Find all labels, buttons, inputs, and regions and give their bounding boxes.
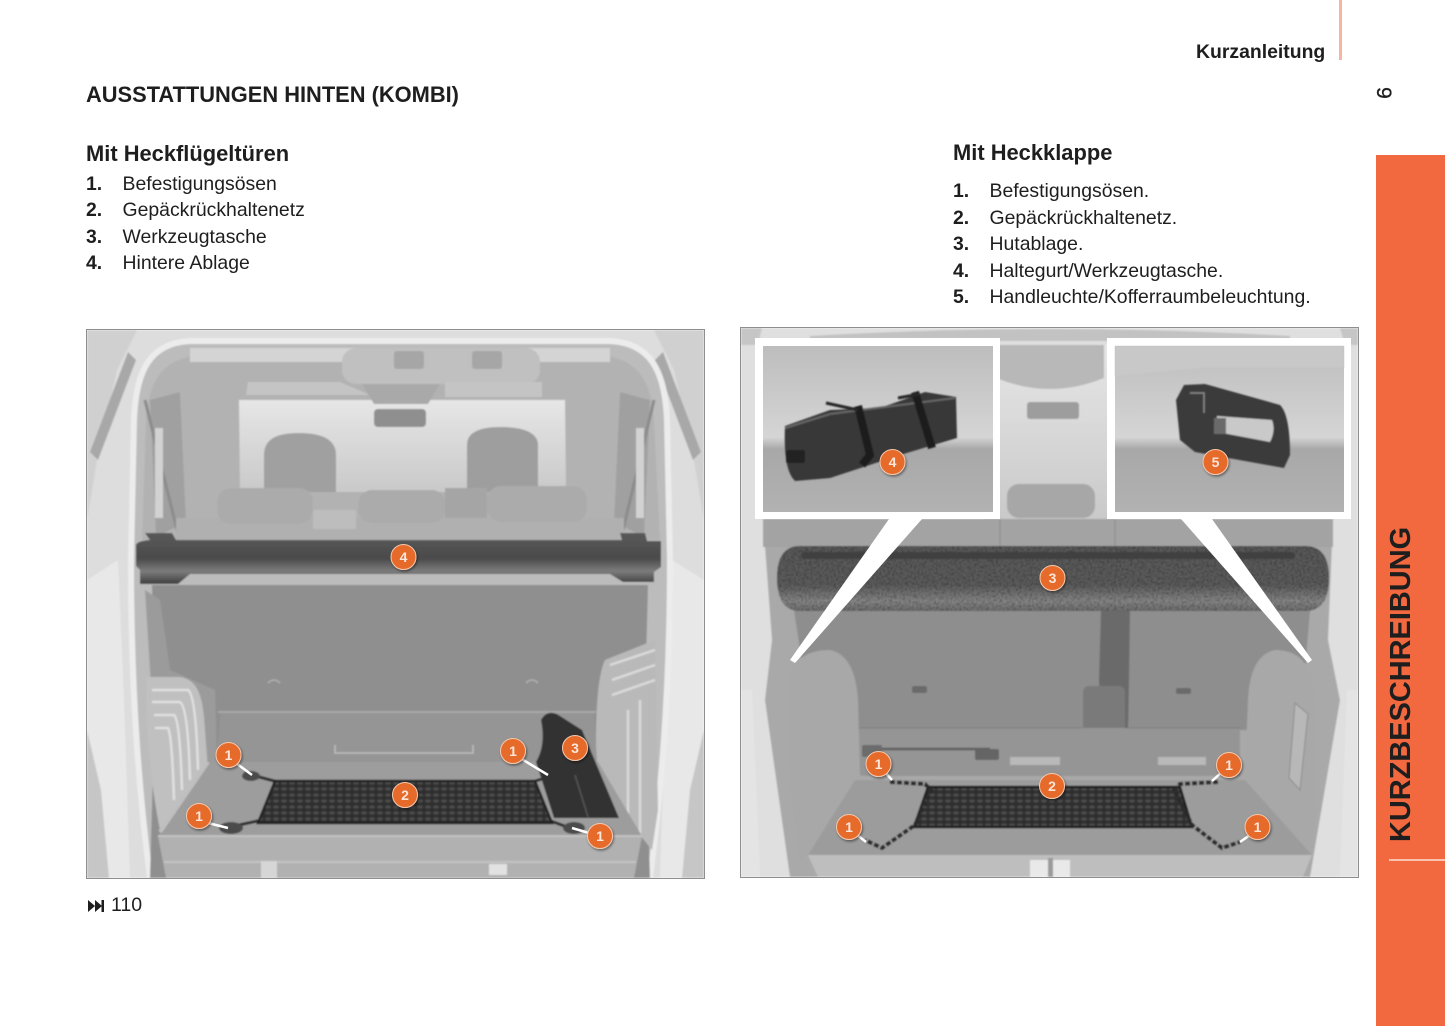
badge 4: 4 — [889, 454, 897, 470]
badge 1 bottom right: 1 — [1254, 819, 1262, 835]
inset: tool bag — [755, 338, 1000, 519]
decorative net attachments — [225, 773, 570, 828]
list: tailgate equipment: Handleuchte/Kofferraumbeleuchtung. — [990, 286, 1311, 308]
badge 1 top right: 1 — [509, 743, 517, 759]
badge 1 bottom left — [186, 804, 212, 828]
photo frame — [86, 330, 704, 878]
section tab: orange sidebar — [1376, 155, 1445, 1026]
badge 2: 2 — [1048, 778, 1056, 794]
badge 1 bottom right — [588, 824, 612, 848]
badge 1 top left: 1 — [225, 747, 233, 763]
photo: rear doors (Heckflügeltüren) — [86, 330, 704, 878]
badge 2 — [1040, 774, 1064, 798]
badge 4 — [880, 450, 905, 474]
badge 5: 5 — [1212, 454, 1220, 470]
list: rear-door equipment: Befestigungsösen — [122, 173, 277, 195]
badge 1 top left: 1 — [875, 756, 883, 772]
list: tailgate equipment: 1. — [953, 180, 969, 202]
list: tailgate equipment: 3. — [953, 233, 969, 255]
top accent bar — [1339, 0, 1342, 60]
badge 3 — [562, 736, 588, 760]
list: rear-door equipment: Hintere Ablage — [122, 252, 250, 274]
list: rear-door equipment — [86, 173, 305, 274]
sidebar label: KURZBESCHREIBUNG — [1385, 527, 1417, 842]
badge 5 — [1203, 450, 1228, 474]
page reference — [88, 894, 142, 916]
badge 1 bottom left — [836, 814, 862, 840]
photo: tailgate (Heckklappe) — [740, 328, 1358, 878]
list: tailgate equipment: Gepäckrückhaltenetz. — [990, 206, 1177, 228]
badge 1 top right — [500, 738, 526, 764]
callout pointer wedges — [790, 519, 922, 663]
page number: 9 — [1372, 87, 1395, 99]
callout badges: right photo — [836, 450, 1270, 840]
badge 1 top right: 1 — [1225, 757, 1233, 773]
page reference: 110 — [111, 894, 142, 916]
badge 4: 4 — [400, 549, 408, 565]
heading: Mit Heckklappe: Mit Heckklappe — [953, 140, 1112, 165]
list: tailgate equipment: 5. — [953, 286, 969, 308]
leaders: right photo — [856, 771, 1250, 842]
badge 3: 3 — [571, 740, 579, 756]
badge 1 bottom right — [1245, 814, 1270, 840]
list: rear-door equipment: 1. — [86, 173, 102, 195]
running header: Kurzanleitung — [1196, 41, 1325, 63]
list: rear-door equipment: 2. — [86, 199, 102, 221]
leaders — [208, 758, 589, 833]
list: rear-door equipment: Gepäckrückhaltenetz — [122, 199, 305, 221]
list: tailgate equipment: 4. — [953, 260, 969, 282]
badge 3: 3 — [1049, 570, 1057, 586]
badge 1 bottom left: 1 — [845, 819, 853, 835]
list: tailgate equipment: Haltegurt/Werkzeugtasche. — [990, 260, 1223, 282]
badge 1 top left — [866, 752, 891, 776]
list: tailgate equipment: 2. — [953, 206, 969, 228]
badge 3 — [1040, 566, 1065, 590]
badge 4 — [391, 544, 416, 570]
sidebar divider — [1389, 859, 1445, 861]
photo frame — [740, 328, 1358, 878]
badge 1 top left — [216, 742, 241, 768]
list: tailgate equipment — [953, 180, 1311, 308]
callout badges: left photo — [186, 544, 612, 848]
badge 1 bottom right: 1 — [596, 828, 604, 844]
inset: lamp — [1107, 338, 1351, 519]
list: tailgate equipment: Befestigungsösen. — [990, 180, 1149, 202]
badge 1 bottom left: 1 — [195, 808, 203, 824]
list: rear-door equipment: 4. — [86, 252, 102, 274]
heading: Mit Heckflügeltüren: Mit Heckflügeltüren — [86, 141, 289, 166]
list: rear-door equipment: Werkzeugtasche — [122, 226, 267, 248]
badge 2: 2 — [401, 787, 409, 803]
list: tailgate equipment: Hutablage. — [990, 233, 1083, 255]
badge 1 top right — [1216, 752, 1242, 778]
main title: AUSSTATTUNGEN HINTEN (KOMBI) — [86, 82, 459, 107]
badge 2 — [392, 782, 418, 808]
list: rear-door equipment: 3. — [86, 226, 102, 248]
